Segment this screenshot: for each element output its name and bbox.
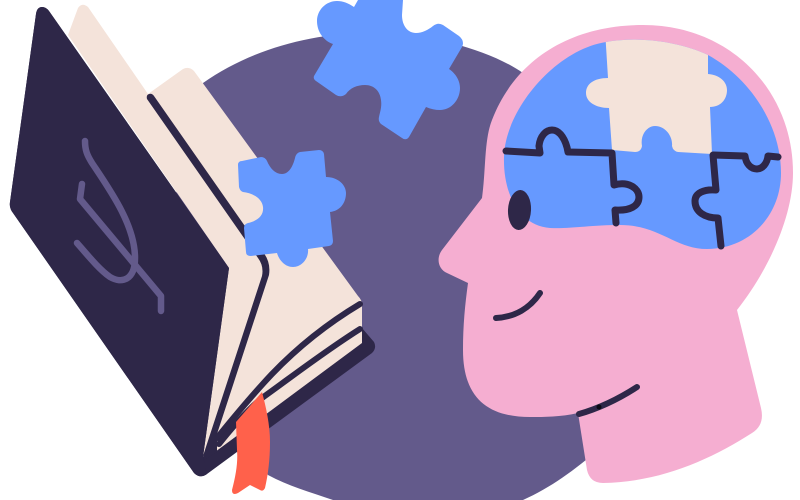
- cream puzzle piece in brain: [586, 30, 727, 154]
- eye: [507, 189, 532, 231]
- page fold line: [147, 94, 269, 460]
- background purple blob: [150, 33, 640, 500]
- book back cover and cover front: [10, 7, 375, 476]
- jaw line: [579, 387, 637, 414]
- brain puzzle area: [504, 40, 781, 249]
- psi symbol on the cover: [77, 141, 161, 311]
- large puzzle piece: [314, 0, 463, 139]
- ribbon bookmark: [232, 392, 270, 494]
- small puzzle piece: [238, 150, 346, 267]
- page edge curves: [217, 304, 360, 444]
- puzzle seam left: [506, 130, 639, 223]
- smile: [496, 293, 540, 318]
- book pages: [68, 5, 362, 457]
- front cover overlap: [10, 7, 229, 476]
- head: [439, 25, 793, 483]
- puzzle seam right: [695, 155, 778, 246]
- brain: [504, 30, 781, 249]
- book: [10, 5, 375, 494]
